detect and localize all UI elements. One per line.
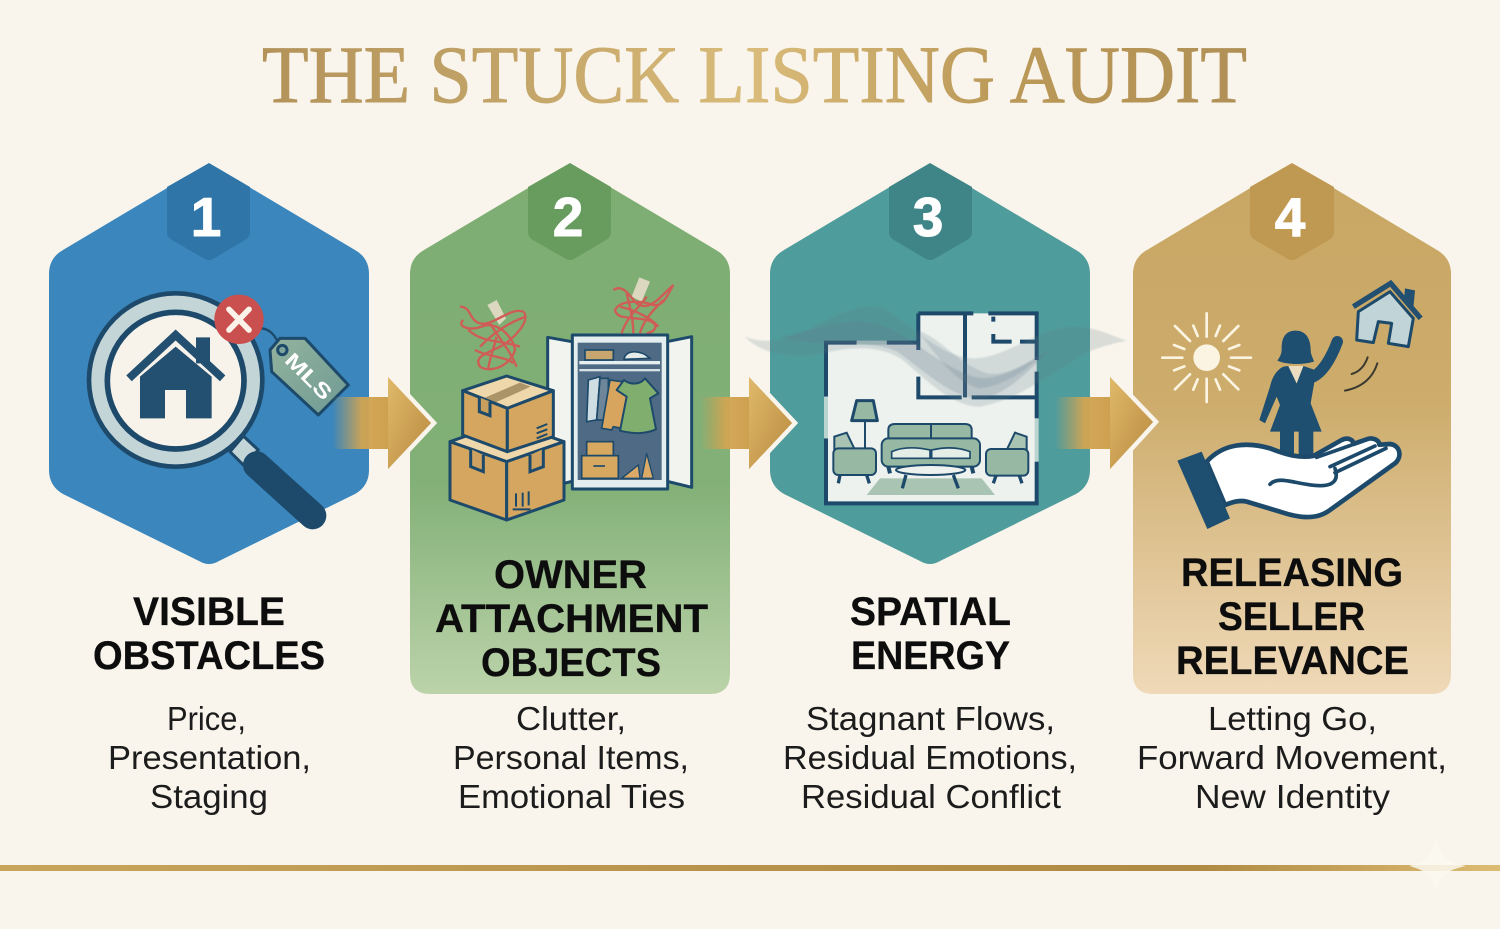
heading: [1176, 551, 1409, 683]
description: Clutter,: [516, 700, 626, 737]
number badge 2: [528, 163, 611, 260]
panel: step 2 owner attachment objects: [410, 163, 730, 815]
icon: magnifying glass over house with MLS tag: MLS: [280, 349, 336, 405]
tangle left: [460, 300, 526, 369]
description: Price,: [167, 700, 246, 737]
heading: OBJECTS: [481, 641, 661, 685]
arrow: step 3 to 4: [1055, 377, 1153, 469]
icon: magnifying glass over house with MLS tag: [89, 293, 348, 516]
sun: [1162, 313, 1251, 402]
description: Emotional Ties: [458, 778, 685, 815]
closet: [548, 337, 578, 487]
description: Forward Movement,: [1137, 739, 1447, 776]
lower box: [450, 422, 564, 462]
number badge 2: 2: [553, 186, 583, 248]
heading: SPATIAL: [850, 590, 1011, 634]
coffee table: [902, 475, 958, 488]
description: Letting Go,: [1208, 700, 1377, 737]
description: Residual Conflict: [801, 778, 1061, 815]
tangle right: [613, 277, 673, 333]
icon: boxes and closet with emotional knots: [450, 277, 692, 520]
floor plan: [826, 313, 1037, 503]
panel: step 4 releasing seller relevance: [1133, 163, 1451, 815]
description: Presentation,: [108, 739, 311, 776]
upper box: [463, 376, 553, 408]
number badge 4: 4: [1275, 186, 1306, 248]
description: [783, 700, 1077, 815]
icon: floor plan with furniture and stagnant flow: [745, 306, 1127, 503]
heading: OWNER: [494, 553, 647, 597]
person: [1277, 331, 1314, 364]
sofa: [888, 424, 972, 440]
house-shaped background: [1133, 166, 1451, 694]
description: [1137, 700, 1447, 815]
heading: [93, 590, 325, 678]
description: New Identity: [1195, 778, 1391, 815]
armchair left: [834, 433, 855, 452]
number badge 3: [889, 163, 972, 260]
heading: ATTACHMENT: [435, 597, 708, 641]
panel: step 3 spatial energy: [745, 163, 1127, 815]
heading: [435, 553, 708, 685]
description: [108, 700, 311, 815]
gold footer rule: [0, 865, 1500, 871]
number badge 1: 1: [191, 186, 221, 248]
heading: RELEASING: [1181, 551, 1403, 595]
number badge 1: [167, 163, 250, 260]
wave of stagnant energy: [745, 306, 1127, 407]
icon: hand releasing seller and house: [1162, 283, 1421, 529]
motion lines: [1345, 357, 1377, 391]
heading: VISIBLE: [133, 590, 285, 634]
heading: [850, 590, 1011, 678]
heading: SELLER: [1218, 595, 1365, 639]
hand: [1207, 438, 1399, 517]
description: Residual Emotions,: [783, 739, 1077, 776]
description: Staging: [150, 778, 268, 815]
floor lamp: [852, 401, 877, 421]
heading: ENERGY: [851, 634, 1010, 678]
rug: [867, 478, 995, 495]
hexagon background: [49, 166, 369, 564]
title: THE STUCK LISTING AUDIT: [262, 29, 1247, 120]
heading: RELEVANCE: [1176, 639, 1409, 683]
arrow: step 1 to 2: [332, 377, 431, 469]
description: [453, 700, 689, 815]
house: [1404, 288, 1415, 308]
number badge 3: 3: [913, 186, 943, 248]
hexagon background: [770, 166, 1090, 564]
heading: OBSTACLES: [93, 634, 325, 678]
panel: step 1 visible obstacles: [49, 163, 369, 815]
description: Stagnant Flows,: [806, 700, 1055, 737]
description: Personal Items,: [453, 739, 689, 776]
arrow: step 2 to 3: [700, 377, 792, 469]
house-shaped background: [410, 166, 730, 694]
armchair right: [1007, 433, 1027, 452]
icon: sparkle: [1409, 835, 1466, 892]
number badge 4: [1250, 163, 1334, 260]
